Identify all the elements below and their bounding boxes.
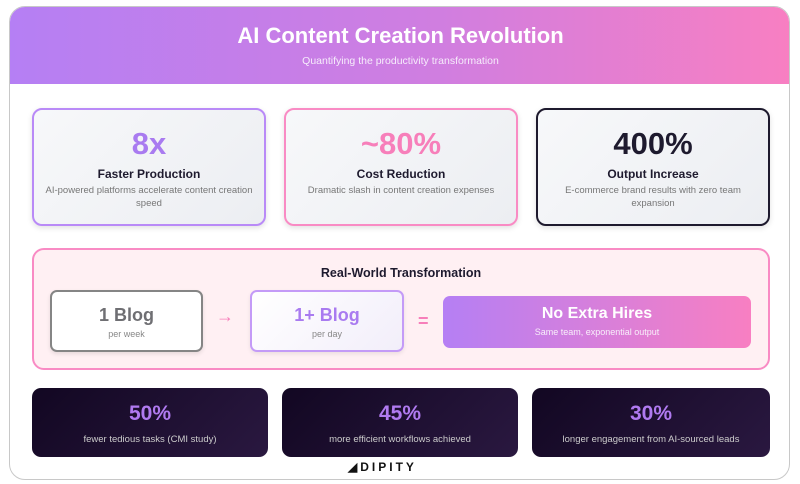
result box: no extra hires: Same team, exponential output xyxy=(535,327,659,337)
dark card: 45%: more efficient workflows achieved xyxy=(329,434,471,445)
stat card: 8x xyxy=(32,108,266,226)
header xyxy=(10,7,791,84)
stat card: 80%: ~80% xyxy=(361,126,441,161)
dark card: 50% xyxy=(32,388,268,457)
box: 1+ blog per day xyxy=(250,290,404,352)
stat card: 8x: Faster Production xyxy=(98,167,200,181)
stat card: 8x: 8x xyxy=(132,126,166,161)
dark card: 30%: longer engagement from AI-sourced leads xyxy=(563,434,739,445)
stat card: 80%: Cost Reduction xyxy=(357,167,445,181)
equals sign: = xyxy=(418,311,429,331)
dark card: 50%: fewer tedious tasks (CMI study) xyxy=(83,434,217,445)
dark card: 45%: 45% xyxy=(379,402,421,425)
box: 1 blog per week: per week xyxy=(108,329,145,339)
stat card: 80%: Dramatic slash in content creation expenses xyxy=(308,185,494,196)
dark card: 30%: 30% xyxy=(630,402,672,425)
dark card: 45% xyxy=(282,388,518,457)
dark card: 50%: 50% xyxy=(129,402,171,425)
dark card: 30% xyxy=(532,388,770,457)
logo: ◢DIPITY xyxy=(348,460,417,474)
arrow: → xyxy=(216,306,234,326)
stat card: 8x: AI-powered platforms accelerate content creation speed xyxy=(46,185,252,209)
box: 1 blog per week xyxy=(50,290,203,352)
stat card: 400% xyxy=(536,108,770,226)
subtitle: Quantifying the productivity transformation xyxy=(302,55,499,67)
result box: no extra hires xyxy=(443,296,751,348)
panel heading: Real-World Transformation xyxy=(321,266,481,280)
box: 1+ blog per day: 1+ Blog xyxy=(294,305,360,325)
box: 1+ blog per day: per day xyxy=(312,329,342,339)
stat card: 80% xyxy=(284,108,518,226)
title: AI Content Creation Revolution xyxy=(237,23,564,48)
box: 1 blog per week: 1 Blog xyxy=(99,305,154,325)
stat card: 400%: Output Increase xyxy=(607,167,699,181)
panel: real-world transformation xyxy=(32,248,770,370)
stat card: 400%: 400% xyxy=(613,126,693,161)
stat card: 400%: E-commerce brand results with zero team expansion xyxy=(565,185,741,209)
result box: no extra hires: No Extra Hires xyxy=(542,305,652,322)
